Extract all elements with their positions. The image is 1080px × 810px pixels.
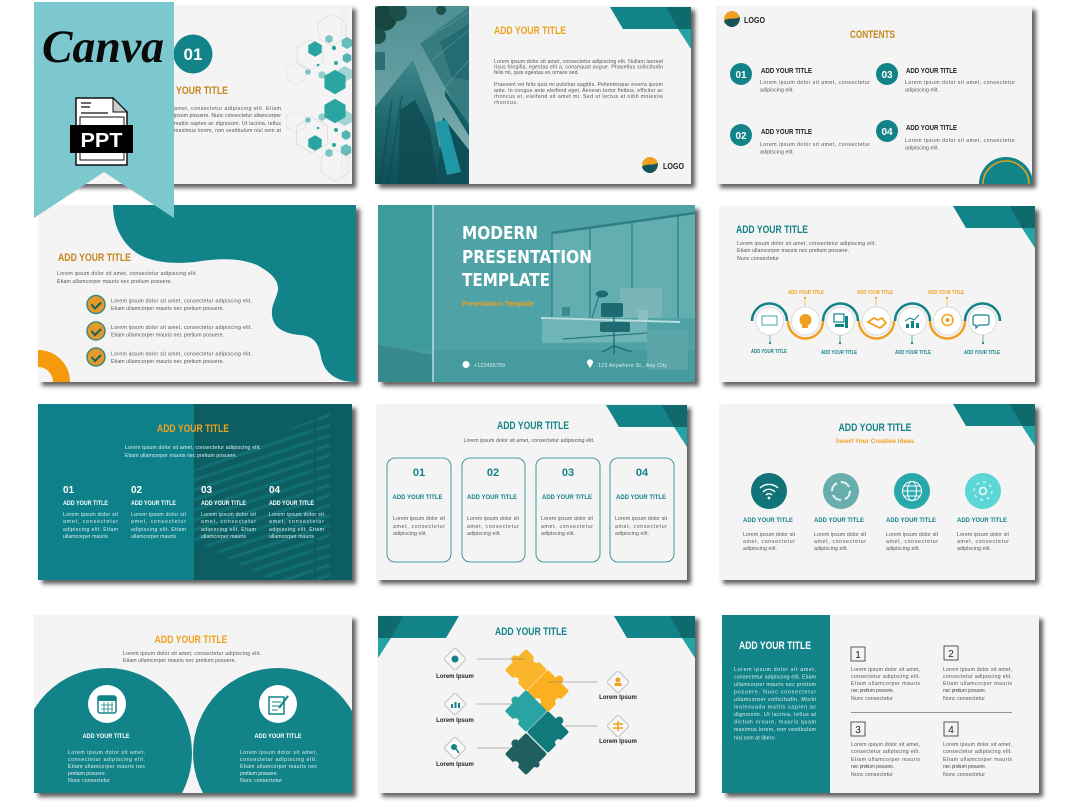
intro text: Lorem ipsum dolor sit amet, consectetur adipiscing elit. [464,438,594,444]
heading: ADD YOUR TITLE [58,252,131,264]
corner shape [606,405,687,447]
checklist item 2: Etiam ullamcorper mauris nec pretium posuere. [111,332,224,338]
card 01: adipiscing elit. [393,531,427,537]
column recycle: amet, consectetur [814,539,866,545]
intro text: Etiam ullamcorper mauris nec pretium posuere. [737,248,849,254]
note 1: 1 [855,650,861,661]
card 01 [387,458,451,562]
right column text: Lorem ipsum dolor sit amet, [240,750,317,756]
divider [851,712,1012,714]
column wifi: amet, consectetur [743,539,795,545]
card 03: amet, consectetur [541,524,593,530]
intro text: Lorem ipsum dolor sit amet, consectetur adipiscing elit. [125,445,261,451]
column network: ADD YOUR TITLE [957,517,1008,524]
left column text [68,733,145,784]
right column text [240,733,317,784]
item 02: Lorem ipsum dolor sit amet, consectetur [760,142,870,148]
left column text: Nunc consectetur [68,778,110,784]
address contact [587,359,667,369]
item 04: ADD YOUR TITLE [906,125,957,132]
note 4: Etiam ullamcorper mauris [943,757,1012,763]
note 1: consectetur adipiscing elit. [851,674,920,680]
column 02: ullamcorper mauris [131,534,176,540]
panel body: Lorem ipsum dolor sit amet, [734,667,816,673]
slide 5: cover [378,205,695,382]
intro text [737,241,876,262]
column 02: Lorem ipsum dolor sit [131,512,187,518]
item 02 [730,124,870,156]
card 01: 01 [413,467,425,479]
note 4 [943,722,1012,778]
column 02: ADD YOUR TITLE [131,500,177,507]
card 04: 04 [636,467,649,479]
icon item bottom right [599,715,637,745]
intro text: Lorem ipsum dolor sit amet, consectetur adipiscing elit. [57,271,197,277]
panel body: maximus lorem, non vestibulum [734,727,816,733]
column 04: adipiscing elit. Etiam [269,527,324,533]
title: PRESENTATION [462,247,592,268]
body text: ipsum posuere. Nunc consectetur ullamcorper [174,113,281,119]
slide 7: teal four columns [38,404,360,588]
item 04: Lorem ipsum dolor sit amet, consectetur [905,138,1015,144]
column 03: ADD YOUR TITLE [201,500,247,507]
item 03: adipiscing elit. [905,88,939,94]
column 01: amet, consectetur [63,519,118,525]
badge 01: 01 [184,45,202,64]
icon item bottom right: Lorem Ipsum [599,739,637,745]
body text: rhoncus. [494,100,518,106]
note 2 [943,646,1012,702]
body text: felis mi, quis egestas ex ornare sed. [494,70,579,76]
icon item top right [599,671,637,701]
body text: Lorem ipsum dolor sit amet, consectetur adipiscing elit. Nullam laoreet [494,59,664,65]
checklist item 3 [87,348,252,366]
item 03: Lorem ipsum dolor sit amet, consectetur [905,80,1015,86]
checklist item 3: Etiam ullamcorper mauris nec pretium posuere. [111,359,224,365]
panel body: dictum ornare, mauris quam [734,720,816,726]
corner shape [610,7,691,49]
intro text: Lorem ipsum dolor sit amet, consectetur adipiscing elit. [123,651,261,657]
PPT file icon [70,98,133,165]
heading: ADD YOUR TITLE [497,420,569,432]
note 2: Nunc consectetur [943,696,985,702]
photo: office [378,205,695,382]
panel body: consectetur adipiscing elit. Etiam [734,674,816,680]
item 01: Lorem ipsum dolor sit amet, consectetur [760,80,870,86]
timeline labels [751,290,1000,356]
note 4: consectetur adipiscing elit. [943,749,1012,755]
note 2: nec pretium posuere. [943,688,986,694]
card 04: adipiscing elit. [615,531,649,537]
slide 3: contents [716,6,1033,211]
column network: Lorem ipsum dolor sit [957,532,1010,538]
intro text: Etiam ullamcorper mauris nec pretium posuere. [57,279,172,285]
logo [724,11,765,27]
slide 6: process timeline [719,206,1035,382]
slide 9: four icon columns [719,404,1035,580]
column 02: amet, consectetur [131,519,186,525]
heading: ADD YOUR TITLE [736,224,808,236]
badge 01 [174,34,212,74]
column 02 [131,485,187,540]
card 03: 03 [562,467,574,479]
item 04: adipiscing elit. [905,146,939,152]
card 03: adipiscing elit. [541,531,575,537]
left column text: Lorem ipsum dolor sit amet, [68,750,145,756]
note 1: nec pretium posuere. [851,688,894,694]
note 3: 3 [855,725,861,736]
Canva wordmark: Canva [42,21,164,73]
card 03: Lorem ipsum dolor sit [541,516,594,522]
panel body: dignissim. Ut lacinia, tellus at [734,712,817,718]
icon item bottom left [436,737,474,768]
checklist item 3: Lorem ipsum dolor sit amet, consectetur adipiscing elit. [111,352,252,358]
checklist item 1: Lorem ipsum dolor sit amet, consectetur adipiscing elit. [111,298,252,304]
body text: amet, consectetur adipiscing elit. Etiam [174,106,281,112]
item 03: ADD YOUR TITLE [906,68,957,75]
body text: Praesent vel felis quis mi pulvinar sagittis. Pellentesque viverra ipsum [494,82,663,88]
card 01: amet, consectetur [393,524,445,530]
checklist item 1: Etiam ullamcorper mauris nec pretium posuere. [111,306,224,312]
note 2: Etiam ullamcorper mauris [943,681,1012,687]
intro text [125,445,261,459]
teal wave [113,205,356,382]
right column text: consectetur adipiscing elit. [240,757,317,763]
body text: maximus lorem, non vestibulum nisl sem at [174,128,282,134]
item 02: ADD YOUR TITLE [761,129,812,136]
corner semicircle [979,157,1032,184]
body text: ante. In congue ante eleifend eget. Aenean tortor finibus, efficitur ac [494,88,663,94]
panel heading: ADD YOUR TITLE [739,640,811,652]
timeline arcs [752,304,1000,338]
item 04: 04 [881,127,893,138]
timeline labels: ADD YOUR TITLE [857,290,893,296]
heading: ADD YOUR TITLE [495,626,567,638]
heading: ADD YOUR TITLE [157,423,229,435]
PPT file icon: PPT [80,130,122,152]
slide 10: two circles [22,615,363,810]
heading: ADD YOUR TITLE [154,634,228,646]
photo: skyscrapers [370,3,469,184]
teal side panel [722,615,830,793]
column 01: adipiscing elit. Etiam [63,527,118,533]
right column text: Etiam ullamcorper mauris nec [240,764,317,770]
panel body: ullamcorper mauris nec pretium [734,682,816,688]
panel body: posuere. Nunc consectetur [734,690,816,696]
column 04: ullamcorper mauris [269,534,314,540]
heading: YOUR TITLE [176,85,228,97]
timeline nodes [756,307,996,335]
column 01: Lorem ipsum dolor sit [63,512,119,518]
slide 1: section 01 [34,5,352,184]
column 02: 02 [131,485,143,496]
icon item middle left: Lorem Ipsum [436,718,474,724]
slide 2: text with building photo [370,3,691,184]
column 03: adipiscing elit. Etiam [201,527,256,533]
column 03: ullamcorper mauris [201,534,246,540]
note 4: Lorem ipsum dolor sit amet, [943,742,1012,748]
icon item top right: Lorem Ipsum [599,695,637,701]
note 3: Etiam ullamcorper mauris [851,757,920,763]
subtitle: Presentation Template [462,301,534,308]
slide 8: four cards [376,404,687,580]
card 02: 02 [487,467,499,479]
calendar icon [88,685,126,723]
heading: CONTENTS [850,29,895,41]
column 03: 03 [201,485,213,496]
logo: LOGO [744,16,765,25]
intro text [123,651,261,664]
timeline labels: ADD YOUR TITLE [928,290,964,296]
column 01: 01 [63,485,75,496]
column 03: Lorem ipsum dolor sit [201,512,257,518]
column network: adipiscing elit. [957,546,991,552]
panel body: ullamcorper sollicitudin. Morbi [734,697,816,703]
column globe: Lorem ipsum dolor sit [886,532,939,538]
checklist item 1 [87,296,252,314]
icon item top left: Lorem Ipsum [436,674,474,680]
right column text: pretium posuere. [240,771,278,777]
column 02: adipiscing elit. Etiam [131,527,186,533]
body text: mattis sapien ac dignissim. Ut lacinia, tellus [174,121,281,127]
heading: ADD YOUR TITLE [838,422,912,434]
intro text: Nunc consectetur [737,256,779,262]
note 3 [851,722,920,778]
corner shape [953,404,1035,446]
left column text: consectetur adipiscing elit. [68,757,145,763]
item 02: 02 [735,131,747,142]
phone contact: +123456789 [474,363,505,369]
column 04 [269,485,325,540]
notepad icon [259,685,297,723]
card 04: amet, consectetur [615,524,667,530]
column recycle: adipiscing elit. [814,546,848,552]
column recycle: ADD YOUR TITLE [814,517,865,524]
slide 12: side panel with four notes [722,615,1039,793]
card 02 [462,458,525,562]
orange quarter ring [38,350,70,382]
title: TEMPLATE [462,270,550,291]
body text [494,59,664,106]
column network [957,473,1010,552]
item 01: adipiscing elit. [760,88,794,94]
subtitle: Insert Your Creative Ideas [836,439,915,445]
column globe [886,473,939,552]
card 04: Lorem ipsum dolor sit [615,516,668,522]
timeline labels: ADD YOUR TITLE [964,350,1000,356]
card 03: ADD YOUR TITLE [542,494,593,501]
column 04: 04 [269,485,281,496]
panel body [734,667,817,742]
timeline labels: ADD YOUR TITLE [788,290,824,296]
logo: LOGO [663,162,684,171]
left column text: Etiam ullamcorper mauris nec [68,764,145,770]
timeline labels: ADD YOUR TITLE [821,350,857,356]
right corner shape [614,616,695,658]
item 03: 03 [881,70,893,81]
note 3: nec pretium posuere. [851,764,894,770]
card 02: adipiscing elit. [467,531,501,537]
icon item top left [436,648,474,680]
corner shape [953,206,1035,248]
note 3: Nunc consectetur [851,772,893,778]
note 4: nec pretium posuere. [943,764,986,770]
heading: ADD YOUR TITLE [494,25,566,37]
slide 4: wavy teal shape with checklist [38,205,364,390]
column network: amet, consectetur [957,539,1009,545]
intro text: Etiam ullamcorper mauris nec pretium posuere. [125,453,237,459]
ribbon: Canva PPT badge [34,2,174,218]
card 01: Lorem ipsum dolor sit [393,516,446,522]
timeline icons [762,314,989,328]
card 01: ADD YOUR TITLE [392,494,443,501]
intro text [57,271,197,285]
note 2: Lorem ipsum dolor sit amet, [943,667,1012,673]
logo [642,157,684,173]
column 03 [201,485,257,540]
connector lines [477,659,597,748]
column 04: Lorem ipsum dolor sit [269,512,325,518]
intro text: Lorem ipsum dolor sit amet, consectetur adipiscing elit. [737,241,876,247]
card 04: ADD YOUR TITLE [616,494,667,501]
note 2: consectetur adipiscing elit. [943,674,1012,680]
column globe: adipiscing elit. [886,546,920,552]
slide 11: puzzle diagram [378,615,695,793]
column recycle [814,473,867,552]
column globe: ADD YOUR TITLE [886,517,937,524]
left corner shape [378,616,459,658]
item 01: 01 [735,70,747,81]
item 01 [730,63,870,94]
timeline labels: ADD YOUR TITLE [895,350,931,356]
note 1: Lorem ipsum dolor sit amet, [851,667,920,673]
column 01: ullamcorper mauris [63,534,108,540]
note 3: Lorem ipsum dolor sit amet, [851,742,920,748]
column wifi: Lorem ipsum dolor sit [743,532,796,538]
note 4: 4 [948,725,954,736]
body text: rhoncus et, eleifend sit amet mi. Sed ut lectus at nibh molestie [494,94,663,100]
column wifi [743,473,796,552]
note 2: 2 [948,649,954,660]
icon item bottom left: Lorem Ipsum [436,762,474,768]
phone contact [462,361,505,369]
intro text: Etiam ullamcorper mauris nec pretium posuere. [123,658,236,664]
column recycle: Lorem ipsum dolor sit [814,532,867,538]
column wifi: ADD YOUR TITLE [743,517,794,524]
column wifi: adipiscing elit. [743,546,777,552]
column 04: ADD YOUR TITLE [269,500,315,507]
icon item middle left [436,693,474,724]
address contact: 123 Anywhere St., Any City [598,363,667,369]
timeline labels: ADD YOUR TITLE [751,349,787,355]
note 1 [851,647,920,702]
card 02: Lorem ipsum dolor sit [467,516,520,522]
hexagon pattern [286,10,352,182]
body text [174,106,282,134]
checklist item 2: Lorem ipsum dolor sit amet, consectetur adipiscing elit. [111,325,252,331]
card 02: amet, consectetur [467,524,519,530]
column globe: amet, consectetur [886,539,938,545]
note 4: Nunc consectetur [943,772,985,778]
panel body: nisl sem at libero. [734,736,776,742]
shaded window panel [194,404,352,580]
puzzle pieces [499,643,575,780]
card 02: ADD YOUR TITLE [467,494,518,501]
left column text: ADD YOUR TITLE [82,733,130,740]
big teal circles [34,668,352,793]
panel body: malesuada mattis sapien ac [734,704,816,710]
note 1: Etiam ullamcorper mauris [851,681,920,687]
right column text: Nunc consectetur [240,778,282,784]
timeline stems [769,297,984,344]
title: MODERN [462,223,538,244]
title [462,223,592,291]
column 01: ADD YOUR TITLE [63,500,109,507]
item 02: adipiscing elit. [760,150,794,156]
left column text: pretium posuere. [68,771,106,777]
column 03: amet, consectetur [201,519,256,525]
note 3: consectetur adipiscing elit. [851,749,920,755]
right column text: ADD YOUR TITLE [254,733,302,740]
note 1: Nunc consectetur [851,696,893,702]
body text: risus fringilla, egestas elit a, consequat augue. Phasellus sollicitudin [494,64,663,70]
card 04 [610,458,674,562]
column 01 [63,485,119,540]
item 04 [876,120,1015,152]
checklist item 2 [87,322,252,340]
card 03 [536,458,600,562]
item 01: ADD YOUR TITLE [761,68,812,75]
column 04: amet, consectetur [269,519,324,525]
item 03 [876,63,1015,94]
